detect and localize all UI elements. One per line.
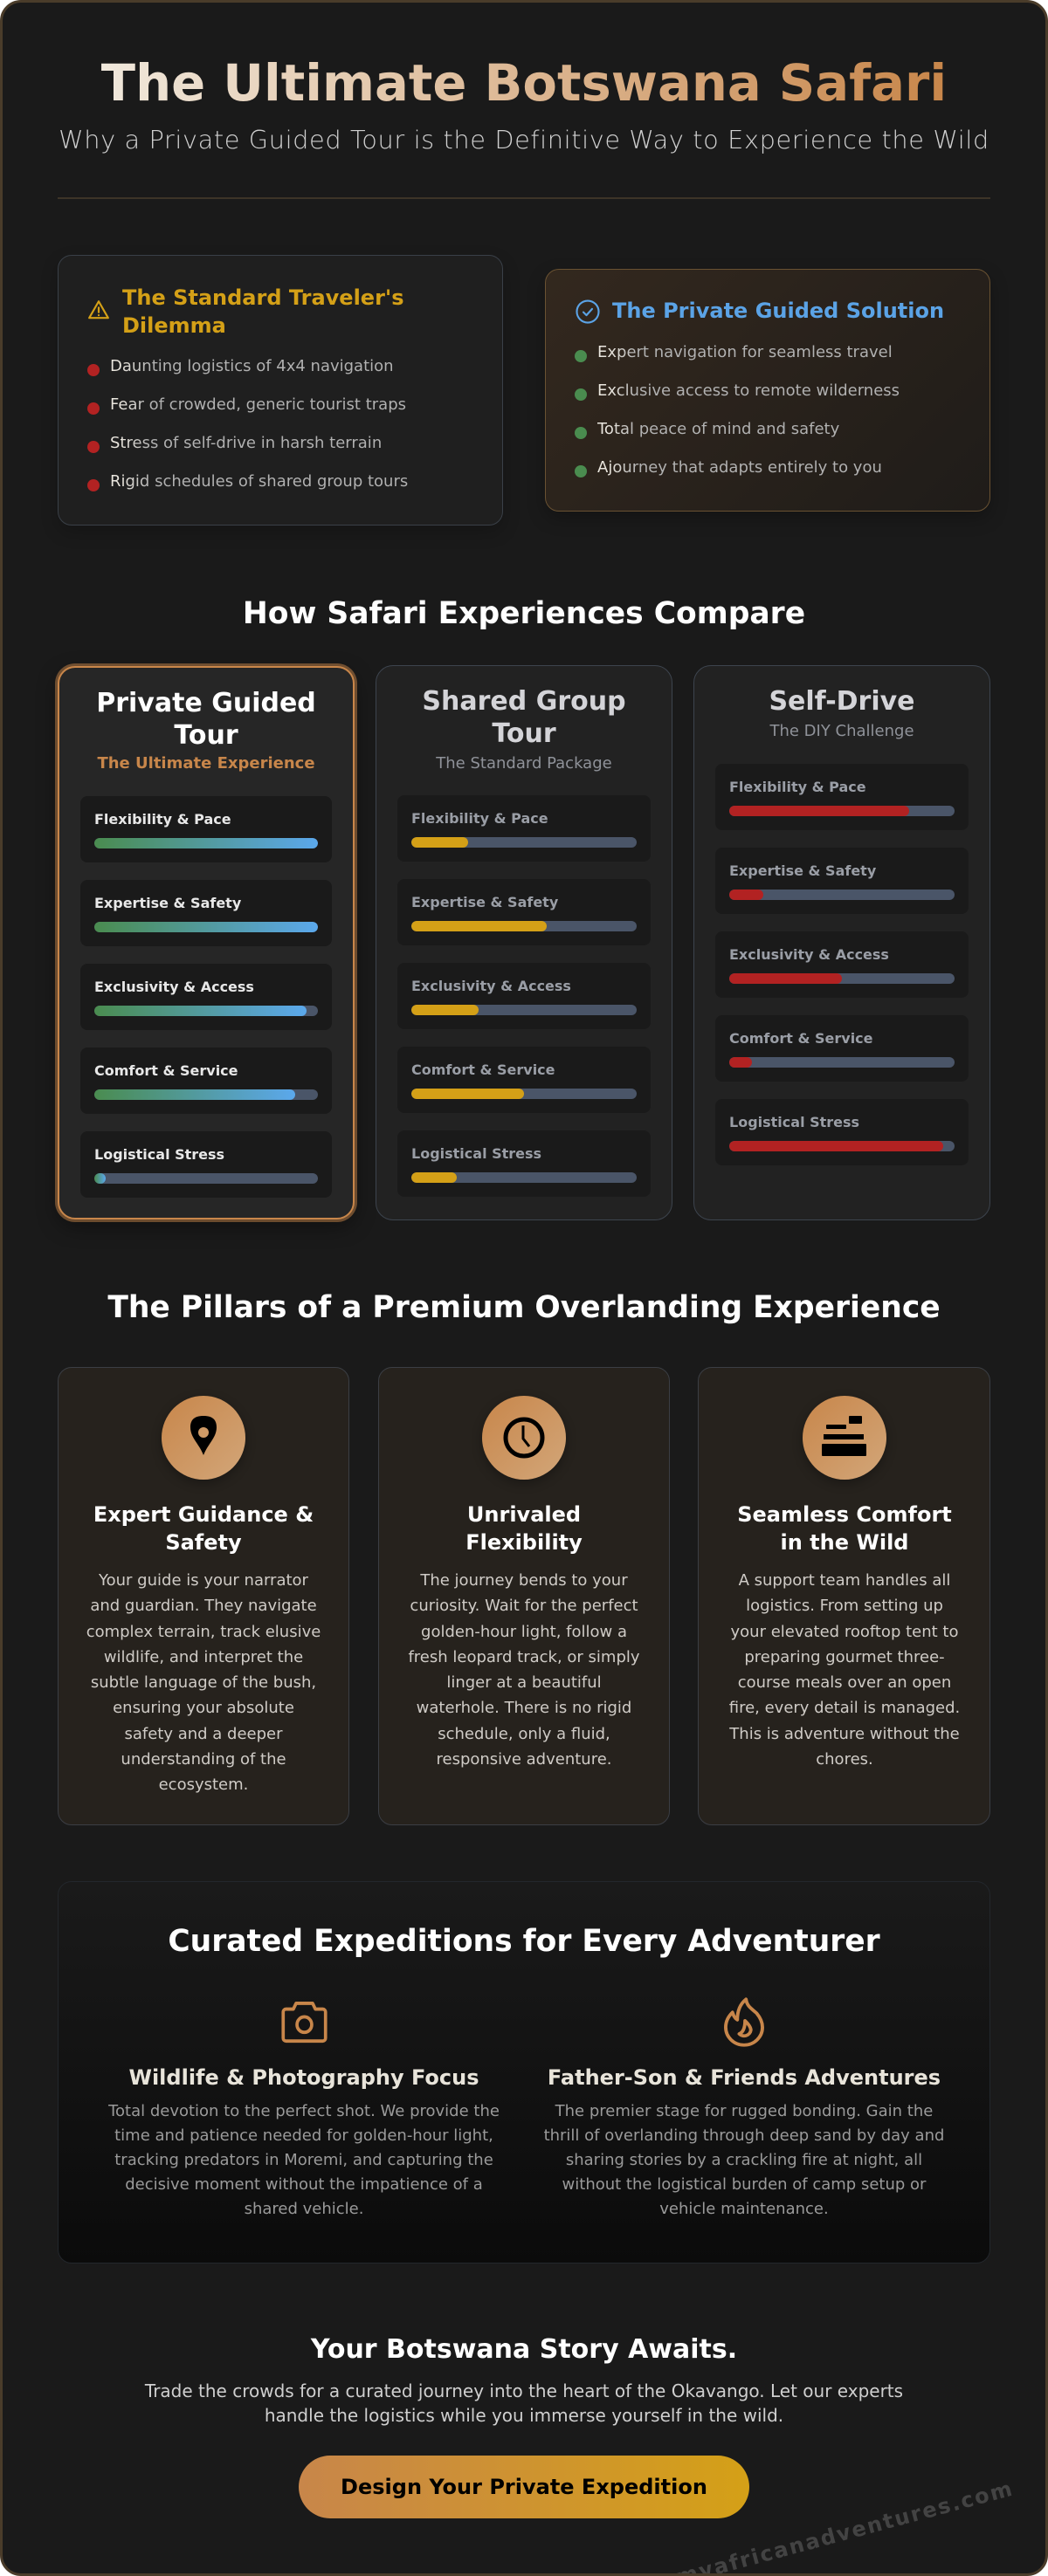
metric: flexibility: Flexibility & Pace: [94, 811, 231, 828]
heading: private guided tour: Private Guided: [96, 688, 316, 718]
heading: how safari experiences compare: How Safari Experiences Compare: [243, 596, 805, 631]
metric: flexibility: Flexibility & Pace: [729, 779, 866, 795]
metric: expertise: [715, 848, 969, 914]
metric: expertise: [397, 879, 651, 945]
metric: exclusivity: Exclusivity & Access: [94, 979, 254, 995]
metric: comfort: [397, 1047, 651, 1113]
metric: stress: [715, 1099, 969, 1165]
text: comfort: fire, every detail is managed.: [729, 1699, 960, 1717]
metric: flexibility: [397, 795, 651, 862]
list: dilemma items: Fear of crowded, generic tourist traps: [110, 395, 406, 414]
icon: map pin: [162, 1396, 245, 1480]
heading: flexibility: Unrivaled: [467, 1502, 581, 1527]
heading: pillars: The Pillars of a Premium Overlanding Experience: [107, 1290, 941, 1325]
list: solution items: Exclusive access to remote wilderness: [597, 381, 900, 400]
text: comfort: This is adventure without the: [729, 1725, 960, 1743]
text: expert guidance: and guardian. They navigate: [90, 1597, 317, 1615]
text: flexibility: schedule, only a fluid,: [438, 1725, 610, 1743]
panel: flexibility: [378, 1367, 670, 1825]
subheading: The Standard Package: [436, 754, 612, 773]
text: expert guidance: understanding of the: [121, 1750, 286, 1769]
text: expert guidance: wildlife, and interpret the: [104, 1648, 303, 1666]
list: solution items: Expert navigation for seamless travel: [597, 343, 893, 361]
text: call to action: [145, 2380, 903, 2426]
panel: private guided tour: [58, 666, 355, 1219]
text: flexibility: The journey bends to your: [420, 1571, 628, 1590]
metric: exclusivity: [715, 931, 969, 998]
list: solution items: [575, 343, 900, 477]
list: solution items: Ajourney that adapts entirely to you: [597, 458, 882, 477]
metric: stress: [80, 1131, 332, 1198]
expedition: father-son text: vehicle maintenance.: [659, 2200, 829, 2218]
heading: standard traveler's dilemma: [122, 285, 404, 338]
button: design your private expedition: [299, 2456, 749, 2518]
list: dilemma items: Daunting logistics of 4x4 navigation: [110, 357, 394, 375]
metric: stress: Logistical Stress: [411, 1145, 541, 1162]
text: call to action: Trade the crowds for a curated journey into the heart of the Okavango. Let our experts: [145, 2380, 903, 2401]
metric: flexibility: [715, 764, 969, 830]
metric: expertise: Expertise & Safety: [729, 862, 876, 879]
text: comfort: preparing gourmet three-: [744, 1648, 945, 1666]
panel: self-drive: [693, 665, 990, 1220]
subtitle: Why a Private Guided Tour is the Definitive Way to Experience the Wild: [59, 125, 989, 155]
expedition: wildlife text: tracking predators in Moremi, and capturing the: [114, 2151, 493, 2169]
button: design your private expedition: Design Your Private Expedition: [341, 2475, 707, 2499]
text: comfort: course meals over an open: [738, 1673, 951, 1692]
text: flexibility: golden-hour light, follow a: [421, 1623, 627, 1641]
metric: expertise: Expertise & Safety: [94, 895, 241, 911]
metric: stress: [397, 1130, 651, 1197]
metric: exclusivity: [80, 964, 332, 1030]
heading: standard traveler's dilemma: Dilemma: [122, 313, 226, 338]
heading: private guided solution: The Private Guided Solution: [612, 299, 944, 323]
icon: bed and supplies: [803, 1396, 886, 1480]
expedition: wildlife text: Total devotion to the perfect shot. We provide the: [108, 2102, 500, 2120]
text: expert guidance: subtle language of the bush,: [91, 1673, 316, 1692]
panel: standard traveler's dilemma: [58, 255, 503, 526]
icon: clock: [482, 1396, 566, 1480]
text: call to action: handle the logistics while you immerse yourself in the wild.: [265, 2405, 783, 2426]
heading: shared group tour: Shared Group: [422, 686, 626, 717]
heading: expert guidance: [93, 1502, 314, 1555]
subheading: The Ultimate Experience: [97, 754, 315, 773]
panel: comfort: [698, 1367, 990, 1825]
heading: shared group tour: Tour: [492, 718, 556, 749]
metric: stress: Logistical Stress: [94, 1146, 224, 1163]
icon: warning triangle: [88, 300, 109, 319]
metric: exclusivity: Exclusivity & Access: [729, 946, 889, 963]
expedition: father-son text: [544, 2102, 944, 2218]
expedition: father-son heading: Father-Son & Friends Adventures: [548, 2065, 941, 2090]
text: expert guidance: Your guide is your narrator: [99, 1571, 308, 1590]
metric: comfort: [80, 1048, 332, 1114]
metric: comfort: Comfort & Service: [94, 1062, 238, 1079]
subheading: The DIY Challenge: [769, 722, 914, 740]
icon: camera: [281, 2002, 328, 2043]
list: dilemma items: Rigid schedules of shared group tours: [110, 472, 408, 491]
text: expert guidance: [86, 1571, 321, 1794]
panel: curated expeditions: [58, 1881, 990, 2263]
text: flexibility: curiosity. Wait for the perfect: [410, 1597, 638, 1615]
expedition: father-son text: thrill of overlanding through deep sand by day and: [544, 2126, 944, 2145]
expedition: wildlife heading: Wildlife & Photography Focus: [128, 2065, 479, 2090]
metric: exclusivity: [397, 963, 651, 1029]
metric: flexibility: [80, 796, 332, 862]
metric: expertise: Expertise & Safety: [411, 894, 558, 910]
text: comfort: your elevated rooftop tent to: [731, 1623, 958, 1641]
icon: check circle: [576, 300, 600, 324]
metric: comfort: Comfort & Service: [411, 1061, 555, 1078]
text: comfort: logistics. From setting up: [746, 1597, 943, 1615]
expedition: father-son text: sharing stories by a crackling fire at night, all: [566, 2151, 922, 2169]
text: expert guidance: complex terrain, track elusive: [86, 1623, 321, 1641]
heading: standard traveler's dilemma: The Standard Traveler's: [122, 285, 404, 310]
heading: call to action: Your Botswana Story Awaits.: [311, 2334, 737, 2365]
heading: comfort: Seamless Comfort: [737, 1502, 952, 1527]
expedition: wildlife text: time and patience needed for golden-hour light,: [114, 2126, 493, 2145]
heading: expert guidance: Safety: [165, 1530, 242, 1555]
expedition: father-son text: without the logistical burden of camp setup or: [562, 2175, 926, 2194]
expedition: wildlife text: decisive moment without the impatience of a: [125, 2175, 483, 2194]
heading: private guided tour: [96, 688, 316, 751]
expedition: father-son text: The premier stage for rugged bonding. Gain the: [555, 2102, 933, 2120]
metric: stress: Logistical Stress: [729, 1114, 859, 1130]
metric: comfort: Comfort & Service: [729, 1030, 873, 1047]
expedition: wildlife text: [108, 2102, 500, 2218]
text: flexibility: [408, 1571, 640, 1769]
text: comfort: chores.: [816, 1750, 873, 1769]
text: expert guidance: ensuring your absolute: [113, 1699, 294, 1717]
metric: expertise: [80, 880, 332, 946]
metric: exclusivity: Exclusivity & Access: [411, 978, 571, 994]
panel: private guided solution: [545, 269, 990, 512]
text: flexibility: fresh leopard track, or simply: [408, 1648, 640, 1666]
expedition: wildlife text: shared vehicle.: [245, 2200, 363, 2218]
heading: private guided tour: Tour: [174, 719, 238, 751]
heading: comfort: in the Wild: [781, 1530, 908, 1555]
text: flexibility: linger at a beautiful: [446, 1673, 602, 1692]
text: flexibility: waterhole. There is no rigid: [417, 1699, 631, 1717]
list: dilemma items: [87, 357, 408, 491]
panel: expert guidance: [58, 1367, 349, 1825]
heading: expert guidance: Expert Guidance &: [93, 1502, 314, 1527]
list: dilemma items: Stress of self-drive in harsh terrain: [110, 434, 382, 452]
heading: flexibility: [465, 1502, 583, 1555]
text: comfort: [729, 1571, 960, 1769]
metric: comfort: [715, 1015, 969, 1082]
title: The Ultimate Botswana Safari: [101, 54, 947, 113]
heading: shared group tour: [422, 686, 626, 749]
text: expert guidance: ecosystem.: [159, 1776, 248, 1794]
text: comfort: A support team handles all: [739, 1571, 950, 1590]
text: flexibility: responsive adventure.: [437, 1750, 611, 1769]
heading: curated expeditions: Curated Expeditions for Every Adventurer: [168, 1924, 880, 1959]
panel: shared group tour: [376, 665, 672, 1220]
metric: flexibility: Flexibility & Pace: [411, 810, 548, 827]
icon: flame: [724, 1997, 764, 2047]
list: solution items: Total peace of mind and safety: [597, 420, 839, 438]
text: expert guidance: safety and a deeper: [124, 1725, 283, 1743]
heading: flexibility: Flexibility: [465, 1530, 583, 1555]
heading: self-drive: Self-Drive: [769, 686, 915, 717]
heading: comfort: [737, 1502, 952, 1555]
